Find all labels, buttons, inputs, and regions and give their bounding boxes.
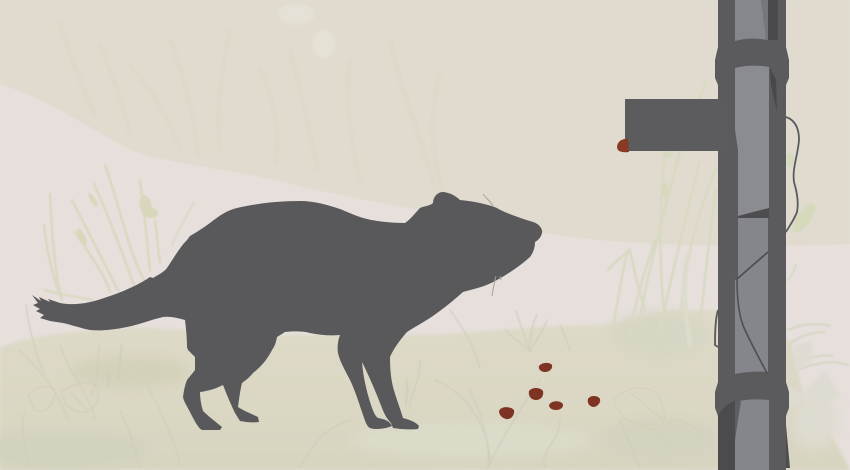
background: reed seed heads — [662, 152, 819, 236]
base right shade — [786, 425, 790, 468]
pellets on ground — [499, 363, 600, 419]
pellet 5 — [499, 407, 514, 419]
background: grass blades left — [44, 165, 194, 300]
background: ground shading patches — [0, 313, 837, 468]
top clamp band — [715, 40, 789, 85]
background: leaves right of feeder — [788, 342, 840, 412]
middle inner panel — [735, 66, 769, 216]
feeder arm — [625, 99, 725, 151]
wire right of pole — [786, 117, 799, 232]
background: tall reeds by feeder — [608, 82, 716, 345]
arm joint shading — [722, 99, 737, 151]
pellet 1 — [539, 363, 552, 372]
bottom clamp band — [715, 374, 789, 416]
lower panel diagonal seam — [737, 252, 768, 279]
base left dark shade — [718, 401, 735, 470]
pellet 3 — [549, 401, 563, 410]
silhouette: Tasmanian devil — [32, 192, 542, 430]
background: grass clump centre — [300, 310, 640, 468]
background: faint upper vegetation — [60, 22, 445, 200]
upper panel shade — [761, 0, 768, 40]
base inner panel — [735, 399, 769, 470]
background: ground plants left — [20, 305, 180, 468]
upper dark slot — [768, 0, 778, 40]
base inner wedge — [735, 401, 741, 440]
background: ground with grass — [0, 310, 850, 470]
pellet 4 — [588, 396, 600, 407]
wire left of pole — [715, 310, 718, 347]
pellet in feeder — [617, 139, 629, 152]
divider wedge — [738, 208, 769, 218]
lower inner panel — [735, 218, 768, 374]
background: leaf outlines near feeder — [614, 388, 705, 445]
pellet 2 — [529, 388, 543, 400]
feeder pole — [715, 0, 790, 470]
upper inner panel — [735, 0, 768, 41]
background: upper beige hill — [0, 0, 850, 246]
background: pale flower — [278, 4, 335, 58]
lower panel curved cable — [737, 279, 767, 373]
middle panel dark wedge — [770, 68, 777, 112]
background: plants right of feeder — [788, 265, 848, 375]
pole body — [718, 0, 786, 470]
whiskers — [483, 194, 501, 296]
background: grass seed heads — [75, 192, 158, 246]
